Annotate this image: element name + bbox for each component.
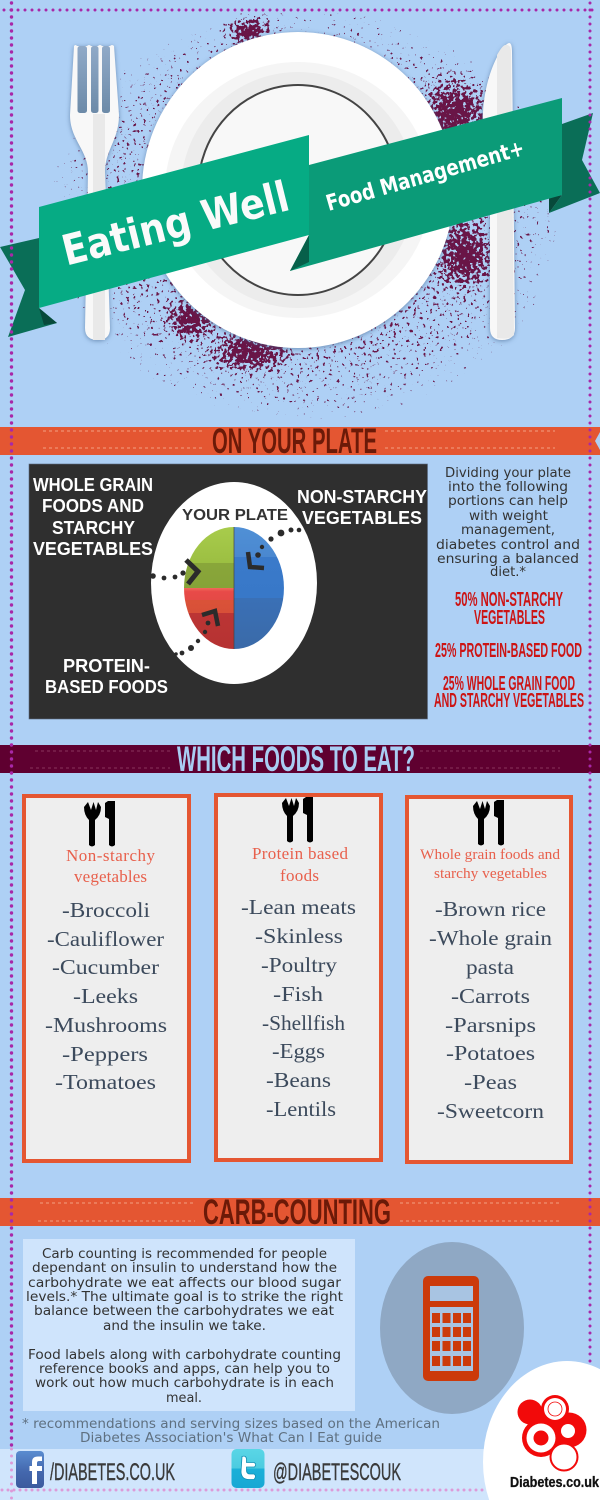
label: protein-based foods: [45, 656, 168, 697]
label: whole grain foods: [33, 475, 153, 559]
subheading: starchy vegetables: [434, 866, 547, 882]
subheading: Protein based: [252, 844, 348, 863]
footnote: * recommendations and serving sizes based on the American: [22, 1417, 440, 1432]
text block: plate portions intro: into the following: [448, 480, 568, 495]
panel: carb counting text: Carb counting is recommended for people: [42, 1247, 327, 1262]
panel: non-starchy vegetables: [24, 796, 189, 1161]
label: whole grain foods: VEGETABLES: [33, 539, 153, 559]
food list: [45, 898, 167, 1094]
text block: portion percentages: [434, 589, 584, 712]
icon: fork: [70, 45, 119, 340]
food list: -Brown rice: [435, 897, 546, 921]
food list: -Shellfish: [262, 1011, 345, 1035]
pie chart: plate portions: [184, 527, 284, 649]
icon: red circle cluster: [518, 1395, 586, 1470]
facebook link: /DIABETES.CO.UK: [50, 1459, 175, 1486]
heading: carb-counting: [0, 1193, 600, 1232]
subheading: Whole grain foods and: [420, 847, 561, 863]
label: whole grain foods: WHOLE GRAIN: [33, 475, 153, 495]
label: non-starchy vegetables: VEGETABLES: [302, 508, 422, 528]
text block: plate portions intro: diet.*: [490, 565, 527, 580]
food list: -Poultry: [261, 953, 338, 977]
food list: -Broccoli: [62, 898, 150, 922]
food list: [429, 897, 553, 1123]
food list: -Peppers: [62, 1042, 148, 1066]
panel: whole grain foods and starchy vegetables: [407, 797, 571, 1162]
panel: carb counting text: Food labels along with carbohydrate counting: [28, 1348, 341, 1363]
heading: on your plate: ON YOUR PLATE: [212, 422, 377, 461]
subheading: [66, 846, 156, 886]
icon: cutlery: [84, 801, 115, 846]
icon: calculator: [380, 1242, 524, 1414]
icon: knife: [483, 43, 515, 340]
label: non-starchy vegetables: [297, 487, 427, 528]
food list: -Leeks: [73, 984, 138, 1008]
panel: carb counting text: reference books and apps, can help you to: [39, 1362, 330, 1377]
footnote: Diabetes Association's What Can I Eat guide: [80, 1431, 382, 1446]
facebook link: [16, 1451, 175, 1488]
food list: [241, 895, 356, 1121]
food list: -Cauliflower: [47, 927, 164, 951]
icon: twitter: [232, 1449, 264, 1488]
subheading: [252, 844, 348, 885]
heading: which foods to eat: WHICH FOODS TO EAT?: [177, 740, 415, 779]
arrow: to protein portion: [174, 611, 218, 656]
panel: carb counting text: work out how much carbohydrate is in each: [35, 1376, 334, 1391]
panel: carb counting text: carbohydrate we eat affects our blood sugar: [28, 1276, 342, 1291]
logo: diabetes.co.uk: [483, 1361, 600, 1500]
twitter link: @DIABETESCOUK: [273, 1459, 401, 1486]
subheading: Non-starchy: [66, 846, 156, 865]
subheading: [420, 847, 561, 882]
subheading: foods: [280, 866, 319, 885]
ribbon: eating well title: Eating Well: [57, 172, 294, 275]
food list: -Whole grain: [429, 926, 553, 950]
food list: -Tomatoes: [55, 1070, 156, 1094]
footnote: [22, 1417, 440, 1446]
icon: plate: [142, 32, 454, 348]
panel: protein based foods: [216, 795, 381, 1160]
ribbon: food management: [290, 98, 600, 271]
text block: plate portions intro: Dividing your plate: [445, 466, 571, 481]
food list: -Lentils: [266, 1097, 336, 1121]
arrow: to non-starchy portion: [248, 528, 301, 568]
panel: carb counting text: dependant on insulin to understand how the: [32, 1261, 337, 1276]
ribbon: food management: Food Management+: [323, 136, 527, 217]
white plate ellipse: [151, 482, 317, 684]
label: protein-based foods: PROTEIN-: [63, 656, 150, 676]
panel: carb counting text: [23, 1239, 355, 1411]
panel: carb counting text: and the insulin we take.: [103, 1319, 266, 1334]
text block: plate portions intro: management,: [461, 523, 555, 538]
heading: which foods to eat: [0, 740, 600, 779]
footer band: [0, 1449, 600, 1500]
food list: -Carrots: [451, 984, 530, 1008]
food list: -Parsnips: [445, 1013, 536, 1037]
label: whole grain foods: STARCHY: [52, 518, 135, 538]
food list: -Skinless: [255, 924, 343, 948]
panel: your plate chart: [29, 464, 428, 719]
label: your plate: YOUR PLATE: [182, 507, 288, 524]
text block: plate portions intro: diabetes control and: [436, 538, 580, 553]
food list: -Cucumber: [52, 955, 159, 979]
panel: carb counting text: meal.: [166, 1391, 202, 1406]
label: non-starchy vegetables: NON-STARCHY: [297, 487, 427, 507]
food list: -Peas: [464, 1070, 517, 1094]
paint splatter behind plate: [50, 8, 560, 420]
food list: -Fish: [273, 982, 324, 1006]
food list: -Potatoes: [446, 1041, 535, 1065]
text block: plate portions intro: with weight: [469, 509, 548, 524]
heading: on your plate: [0, 422, 600, 461]
subheading: vegetables: [74, 867, 147, 886]
food list: -Sweetcorn: [437, 1099, 545, 1123]
panel: carb counting text: balance between the carbohydrates we eat: [34, 1304, 334, 1319]
food list: -Mushrooms: [45, 1013, 167, 1037]
arrow: to whole grain portion: [150, 560, 198, 584]
text block: plate portions intro: ensuring a balanced: [437, 552, 579, 567]
ribbon: eating well title: [0, 135, 309, 337]
icon: facebook: [16, 1451, 44, 1488]
hero illustration: plate, cutlery and ribbon title: [0, 8, 600, 420]
food list: pasta: [466, 955, 515, 979]
label: whole grain foods: FOODS AND: [42, 496, 144, 516]
icon: cutlery: [473, 800, 504, 846]
text block: plate portions intro: [436, 466, 580, 580]
food list: -Lean meats: [241, 895, 356, 919]
icon: cutlery: [282, 797, 313, 842]
food list: -Beans: [266, 1068, 331, 1092]
panel: carb counting text: levels.* The ultimate goal is to strike the right: [26, 1290, 343, 1305]
label: protein-based foods: BASED FOODS: [45, 677, 168, 697]
twitter link: [232, 1449, 401, 1488]
food list: -Eggs: [272, 1039, 325, 1063]
text block: plate portions intro: portions can help: [448, 494, 568, 509]
heading: carb-counting: CARB-COUNTING: [203, 1193, 391, 1232]
